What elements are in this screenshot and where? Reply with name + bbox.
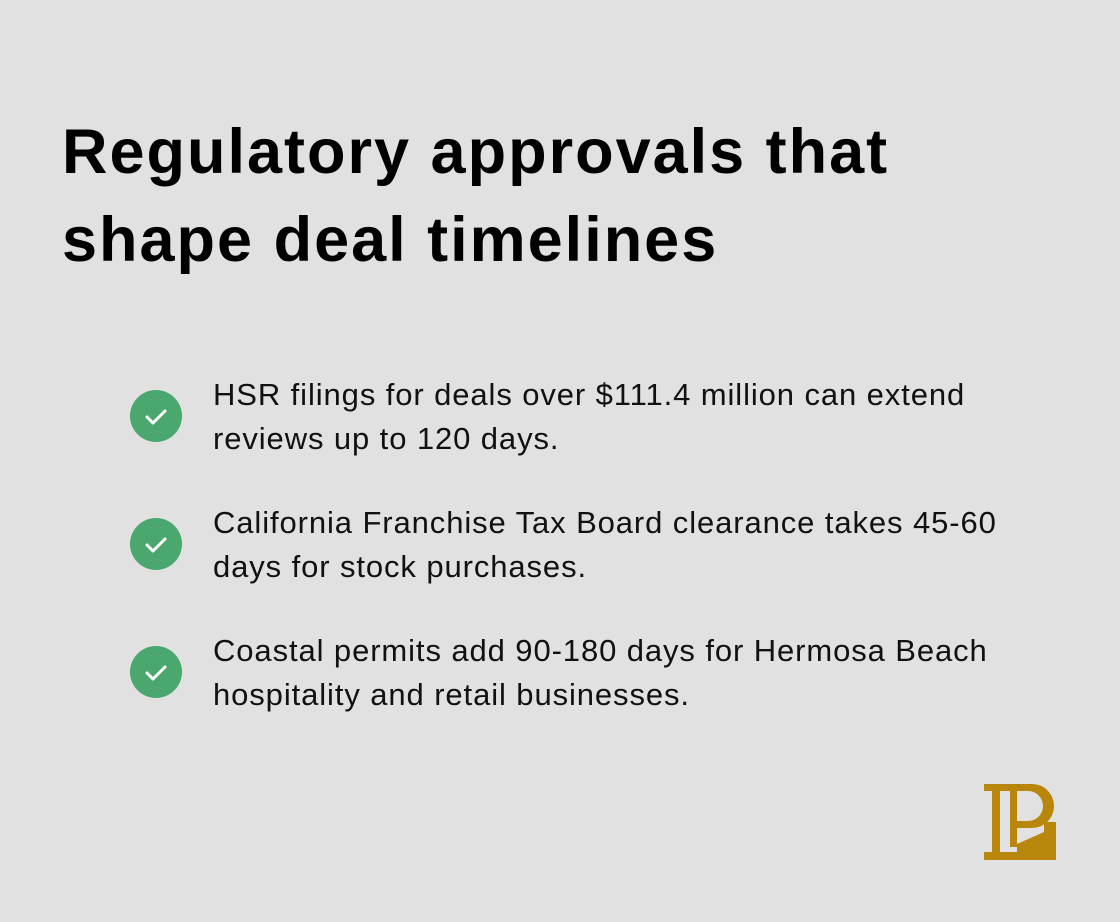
title: Regulatory approvals that <box>62 117 889 187</box>
text <box>213 633 988 712</box>
item: HSR <box>130 377 965 456</box>
text: days for stock purchases. <box>213 549 587 584</box>
icon: check <box>130 390 182 442</box>
item: FTB <box>130 505 997 584</box>
item: coastal <box>130 633 988 712</box>
title <box>62 117 889 275</box>
logo <box>984 784 1056 860</box>
icon: check <box>130 518 182 570</box>
text: hospitality and retail businesses. <box>213 677 690 712</box>
text <box>213 377 965 456</box>
text: California Franchise Tax Board clearance takes 45-60 <box>213 505 997 540</box>
text: HSR filings for deals over $111.4 million can extend <box>213 377 965 412</box>
title: shape deal timelines <box>62 205 718 275</box>
text: Coastal permits add 90-180 days for Hermosa Beach <box>213 633 988 668</box>
icon: check <box>130 646 182 698</box>
text: reviews up to 120 days. <box>213 421 559 456</box>
text <box>213 505 997 584</box>
